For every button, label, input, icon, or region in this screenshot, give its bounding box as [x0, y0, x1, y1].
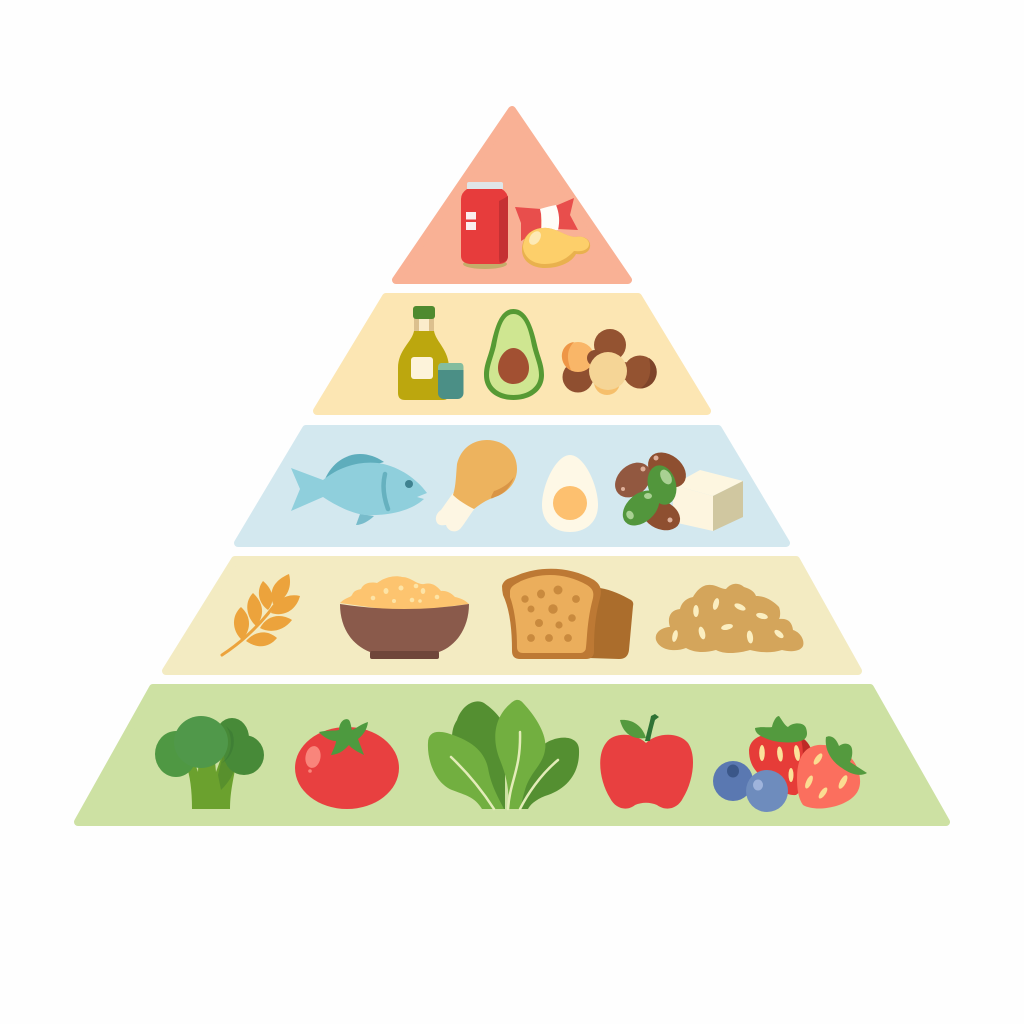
tier 5: vegetables and fruits	[78, 688, 946, 822]
icon: boiled egg	[542, 455, 598, 532]
icon: bowl of grains	[340, 576, 469, 659]
band: proteins trapezoid	[238, 429, 786, 543]
icon: wrapped candy	[515, 198, 578, 241]
tier 4: grains	[166, 560, 858, 671]
icon: bread loaf	[502, 569, 633, 659]
tier 2: healthy fats	[317, 297, 707, 411]
band: top triangle	[396, 110, 628, 280]
icon: avocado half	[484, 309, 544, 400]
icon: fish	[291, 454, 427, 525]
icon: grain pile	[656, 584, 803, 653]
icon: oil bottle	[398, 306, 464, 400]
icon: tofu block	[673, 470, 743, 531]
icon: wheat sprig	[222, 574, 300, 655]
icon: mixed nuts	[562, 329, 657, 395]
band: produce trapezoid	[78, 688, 946, 822]
icon: tomato	[295, 719, 399, 809]
tier 1: sweets and soda	[396, 110, 628, 280]
icon: beans	[608, 445, 693, 536]
icon: strawberries and blueberries	[713, 716, 867, 812]
tier 3: proteins	[238, 429, 786, 543]
icon: broccoli	[155, 716, 264, 809]
icon: yellow fat drop	[522, 228, 590, 268]
icon: apple	[600, 714, 693, 809]
band: fats trapezoid	[317, 297, 707, 411]
band: grains trapezoid	[166, 560, 858, 671]
icon: chicken drumstick	[436, 440, 517, 531]
icon: spinach	[428, 700, 579, 809]
icon: soda can	[461, 182, 508, 269]
